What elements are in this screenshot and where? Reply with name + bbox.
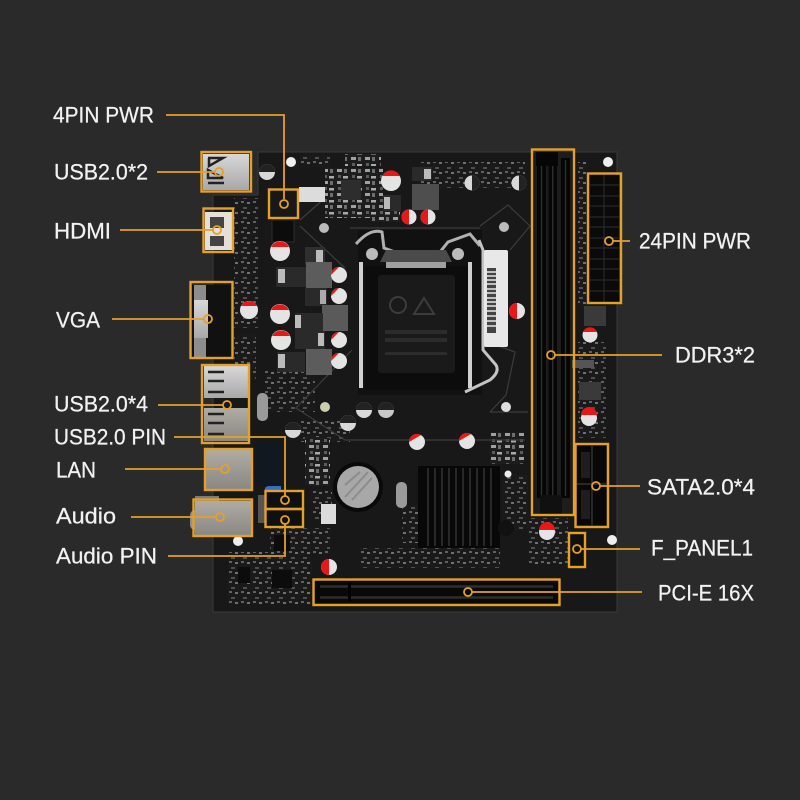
labels: USB2.0*4: [54, 392, 148, 416]
retention frame: [361, 262, 470, 388]
labels: PCI-E 16X: [658, 580, 754, 606]
PCI-E slot: [315, 581, 558, 603]
motherboard: [190, 152, 619, 612]
CPU socket: [356, 230, 497, 395]
labels: F_PANEL1: [651, 536, 753, 560]
white connector: [299, 187, 325, 202]
pin headers: [305, 436, 320, 484]
mounting holes: [233, 157, 617, 546]
labels: 24PIN PWR: [639, 228, 751, 254]
header pins: [266, 492, 302, 526]
24 pin connector: [590, 175, 619, 302]
labels: HDMI: [54, 218, 111, 244]
audio jacks: [190, 496, 251, 535]
callout boxes: [190, 150, 621, 605]
labels: DDR3*2: [675, 342, 755, 368]
labels: Audio PIN: [56, 544, 157, 568]
chipset heatsink: [418, 466, 514, 548]
HDMI port: [205, 212, 233, 250]
labels: USB2.0 PIN: [54, 424, 166, 450]
MOSFETs and chokes: [272, 167, 606, 400]
capacitors: [240, 164, 598, 575]
socket cover: [365, 266, 468, 390]
socket base: [358, 230, 482, 395]
leader lines: [112, 115, 662, 596]
labels: 4PIN PWR: [53, 102, 154, 128]
DDR3 slots: [535, 152, 572, 514]
LAN port: [206, 450, 251, 489]
board PCB: [213, 152, 617, 612]
VRM diagonal traces: [296, 198, 530, 440]
labels: [53, 102, 755, 606]
barcode sticker: [484, 250, 508, 347]
USB ports stack: [204, 366, 248, 441]
front USB header blue element: [265, 485, 281, 492]
labels: USB2.0*2: [54, 160, 148, 184]
crystals: [257, 393, 407, 508]
F_PANEL header: [570, 534, 584, 566]
black inductor block: [255, 441, 281, 486]
white small connector: [321, 504, 336, 524]
component clusters: [228, 154, 606, 604]
USB ports top: [203, 154, 249, 190]
labels: VGA: [56, 308, 100, 332]
labels: LAN: [56, 458, 96, 482]
VGA port: [192, 285, 230, 357]
PCIe side chips: [238, 535, 292, 588]
CMOS battery: [333, 462, 383, 512]
labels: SATA2.0*4: [647, 474, 755, 500]
lever: [465, 240, 497, 392]
frame screws: [366, 248, 378, 260]
SATA connectors: [577, 446, 606, 525]
labels: Audio: [56, 504, 116, 528]
